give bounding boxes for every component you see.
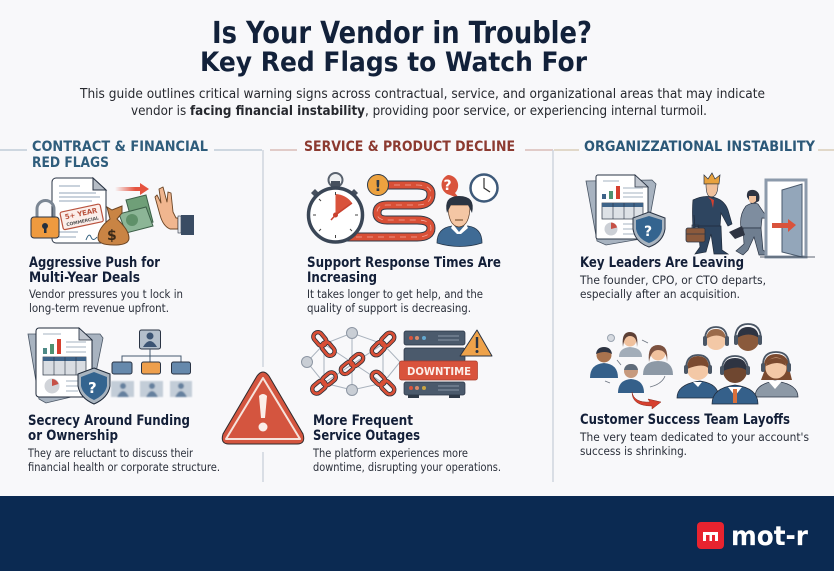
- logo: mot-r: [697, 521, 809, 552]
- text: key leaders description: The founder, CPO, or CTO departs,: [579, 273, 766, 287]
- icon: broken chain network and server downtime: DOWNTIME: [407, 365, 471, 378]
- icon: documents and departing leaders: [586, 173, 815, 257]
- text: secrecy description: They are reluctant to discuss their: [27, 446, 193, 460]
- text: secrecy description: [27, 446, 220, 474]
- heading: secrecy: Secrecy Around Funding: [28, 413, 190, 429]
- logo: mot-r: mot-r: [731, 521, 809, 552]
- heading: service and product decline: SERVICE & PRODUCT DECLINE: [304, 139, 515, 155]
- heading: aggressive push: Aggressive Push for: [29, 255, 160, 271]
- heading: contract and financial red flags: [32, 139, 208, 171]
- intro text: This guide outlines critical warning signs across contractual, service, and organizational areas that may indicate: [79, 86, 765, 102]
- icon: large warning triangle: [222, 372, 304, 444]
- icon: contract with lock, money and stop hand: 5+ YEAR: [64, 206, 99, 221]
- text: aggressive push description: [29, 287, 183, 315]
- text: support response description: It takes longer to get help, and the: [307, 287, 483, 301]
- heading: support response: [307, 255, 501, 286]
- heading: aggressive push: Multi-Year Deals: [29, 270, 140, 286]
- text: layoffs description: success is shrinking.: [580, 444, 687, 458]
- title: Is Your Vendor in Trouble?: [212, 16, 592, 51]
- icon: stopwatch and winding road with support agent: ?: [444, 178, 452, 194]
- icon: broken chain network and server downtime: [302, 328, 492, 398]
- heading: service outages: Service Outages: [313, 428, 420, 444]
- icon: contract with lock, money and stop hand: COMMERCIAL: [66, 215, 100, 228]
- icon: financial documents and org chart: [28, 328, 192, 404]
- heading: service outages: [313, 413, 420, 444]
- heading: layoffs: Customer Success Team Layoffs: [580, 412, 790, 428]
- text: secrecy description: financial health or corporate structure.: [28, 460, 220, 474]
- intro text: [79, 86, 765, 119]
- heading: support response: Increasing: [307, 270, 377, 286]
- heading: secrecy: [28, 413, 190, 444]
- text: aggressive push description: long-term revenue upfront.: [29, 301, 169, 315]
- title: Key Red Flags to Watch For: [200, 47, 588, 78]
- text: service outages description: downtime, disrupting your operations.: [313, 460, 501, 474]
- heading: secrecy: or Ownership: [28, 428, 118, 444]
- icon: stopwatch and winding road with support agent: [308, 173, 498, 246]
- text: support response description: [307, 287, 483, 315]
- intro text: vendor is facing financial instability, providing poor service, or experiencing internal turmoil.: [131, 103, 707, 119]
- heading: key leaders: Key Leaders Are Leaving: [580, 255, 744, 271]
- title: [200, 16, 592, 78]
- heading: support response: Support Response Times Are: [307, 255, 501, 271]
- icon: customer success team with headsets: [590, 324, 798, 409]
- text: service outages description: [312, 446, 501, 474]
- heading: contract and financial red flags: RED FLAGS: [32, 155, 109, 171]
- text: service outages description: The platform experiences more: [312, 446, 468, 460]
- icon: documents and departing leaders: ?: [644, 224, 652, 240]
- icon: stopwatch and winding road with support agent: !: [374, 177, 381, 195]
- footer band: [0, 496, 834, 571]
- text: key leaders description: [579, 273, 766, 301]
- text: layoffs description: [579, 430, 809, 458]
- icon: contract with lock, money and stop hand: [31, 178, 194, 245]
- text: key leaders description: especially after an acquisition.: [580, 287, 740, 301]
- heading: aggressive push: [29, 255, 160, 286]
- icon: contract with lock, money and stop hand: $: [107, 228, 117, 244]
- icon: financial documents and org chart: ?: [88, 379, 97, 397]
- heading: service outages: More Frequent: [313, 413, 413, 429]
- text: layoffs description: The very team dedicated to your account's: [579, 430, 809, 444]
- heading: contract and financial red flags: CONTRACT & FINANCIAL: [32, 139, 208, 155]
- text: aggressive push description: Vendor pressures you t lock in: [29, 287, 183, 301]
- text: support response description: quality of support is decreasing.: [307, 301, 471, 315]
